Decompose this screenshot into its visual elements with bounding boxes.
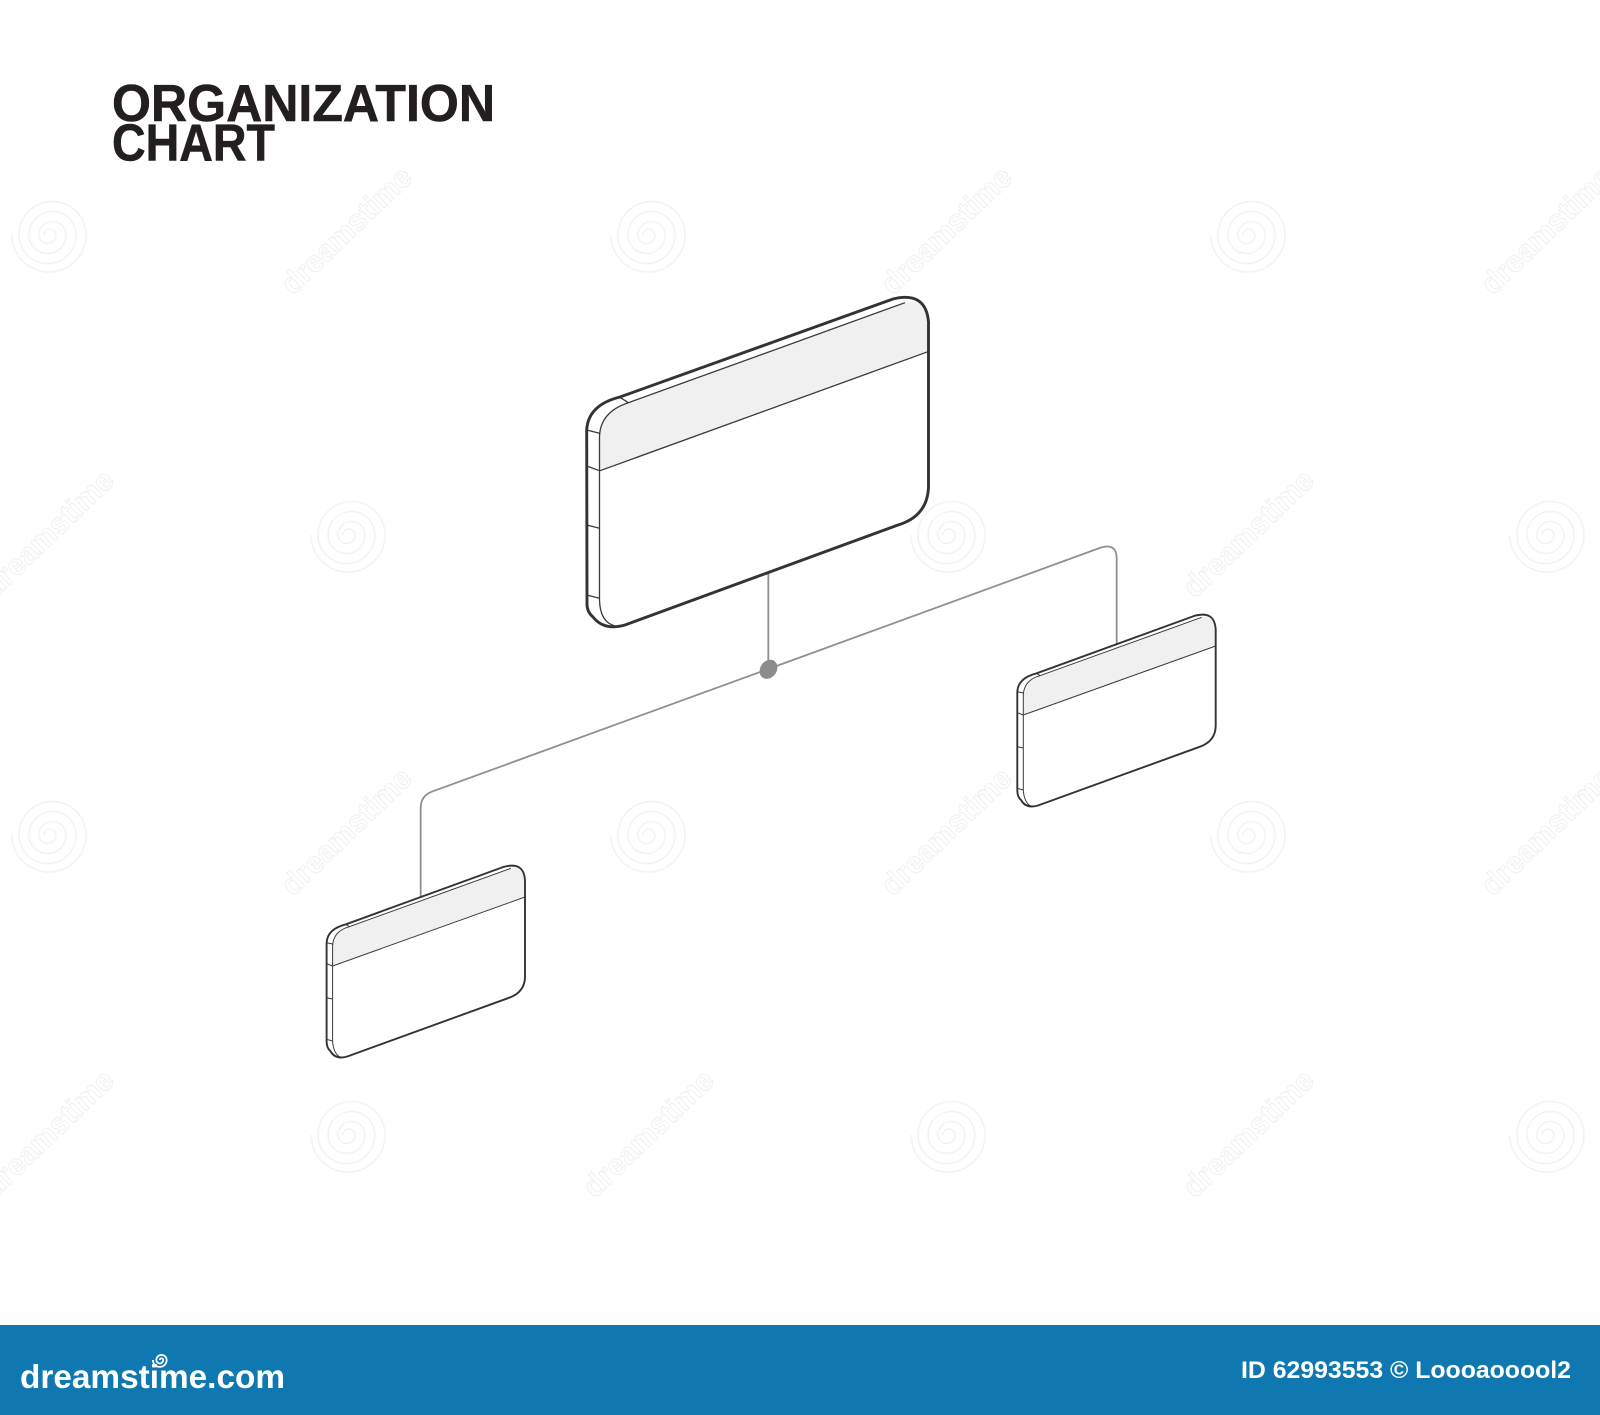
left card body	[327, 866, 525, 1057]
footer logo	[20, 1355, 285, 1395]
watermark layer: dreamstime	[275, 161, 419, 301]
right card header band	[1023, 617, 1216, 715]
left card	[327, 866, 525, 1058]
top card header band	[600, 302, 928, 471]
watermark layer: dreamstime	[275, 762, 419, 902]
watermark layer: dreamstime	[1177, 464, 1321, 604]
top card outline	[587, 297, 928, 627]
top card body	[587, 297, 928, 627]
title: ORGANIZATION	[112, 75, 495, 133]
footer bar	[0, 1325, 1600, 1415]
connector lines	[421, 546, 1117, 897]
left card inner lines	[327, 868, 525, 1058]
left card header band	[333, 868, 525, 966]
watermark layer: dreamstime	[577, 1064, 721, 1204]
footer image id and credit: ID 62993553 © Loooaooool2	[1241, 1357, 1571, 1384]
top card inner lines	[587, 303, 928, 626]
title: CHART	[112, 114, 275, 172]
right card	[1017, 615, 1216, 807]
connector node dot	[756, 656, 781, 682]
right card outline	[1017, 615, 1216, 806]
watermark layer	[0, 161, 1600, 1204]
watermark layer: dreamstime	[875, 161, 1019, 301]
watermark layer: dreamstime	[577, 464, 721, 604]
logo wordmark: dreamstime.com	[20, 1358, 285, 1395]
left card outline	[327, 866, 525, 1057]
watermark layer: dreamstime	[875, 762, 1019, 902]
watermark layer: dreamstime	[1177, 1064, 1321, 1204]
logo spiral icon	[153, 1355, 167, 1367]
right card inner lines	[1017, 617, 1216, 807]
right card body	[1017, 615, 1216, 806]
top card	[587, 297, 928, 627]
title	[112, 75, 495, 172]
